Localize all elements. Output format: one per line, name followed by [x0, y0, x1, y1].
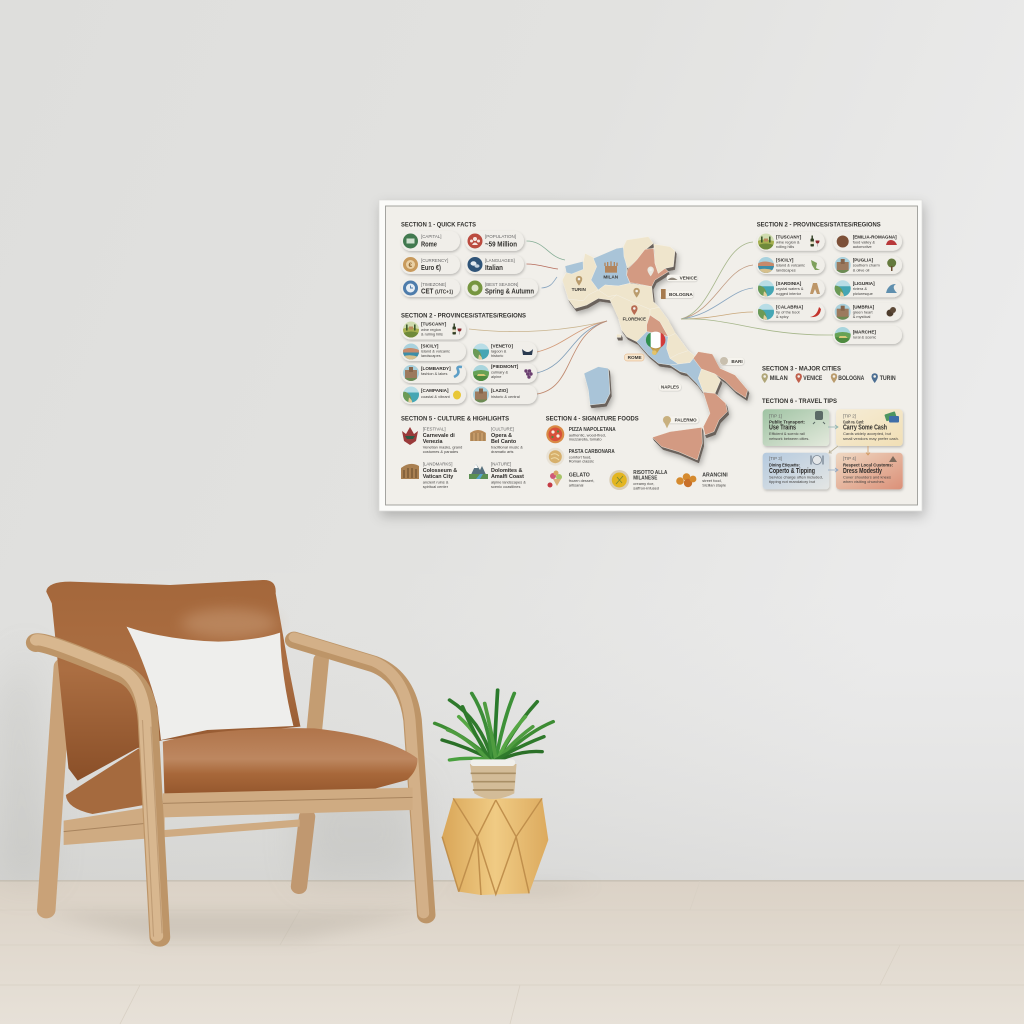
tip 2: Cards widely accepted, but — [843, 431, 892, 436]
white pillow — [127, 627, 293, 740]
tip 1: network between cities. — [769, 436, 809, 441]
item: culture — [470, 427, 523, 454]
label: Bologna — [660, 289, 693, 299]
fact: currency — [401, 255, 460, 274]
tip 2: Cash vs. Card: — [843, 419, 864, 424]
heading: section 2 right: SECTION 2 - PROVINCES/STATES/REGIONS — [757, 222, 881, 228]
item: landmarks: Vatican City — [423, 474, 453, 480]
tip 4: [TIP 4] — [843, 456, 856, 461]
label: Florence: FLORENCE — [623, 317, 646, 322]
region: Campania: [CAMPANIA] — [421, 388, 449, 393]
region: Umbria: green heart — [853, 309, 874, 314]
city: Bologna: BOLOGNA — [838, 376, 865, 382]
heading: section 6: TECTION 6 - TRAVEL TIPS — [762, 398, 837, 405]
region: Piedmont: culinary & — [491, 370, 508, 374]
tip 4: when visiting churches. — [843, 479, 885, 484]
tip 1: Public Transport: — [769, 419, 805, 424]
fact: best season: [BEST SEASON] — [485, 282, 518, 287]
food: gelato — [548, 470, 594, 488]
region: Piedmont: [PIEDMONT] — [491, 364, 519, 369]
item: festival: Venezia — [423, 439, 443, 445]
region: Veneto — [471, 342, 537, 361]
label: Bari: BARI — [731, 359, 743, 364]
item: nature — [469, 462, 526, 489]
region: Emilia-Romagna — [833, 232, 902, 251]
food: pizza: PIZZA NAPOLETANA — [569, 427, 616, 433]
tip 1: Efficient & scenic rail — [769, 431, 805, 436]
item: landmarks: ancient ruins & — [423, 480, 449, 485]
fact: capital: Rome — [421, 240, 437, 248]
section 2: provinces, left column — [401, 312, 537, 404]
floor shadows — [40, 885, 600, 940]
label: Palermo — [663, 416, 699, 428]
woven pot — [470, 764, 517, 799]
seat rails — [64, 788, 413, 845]
region: Lazio — [471, 385, 537, 404]
food: pizza: authentic, wood-fired, — [569, 432, 606, 437]
fact: languages: Italian — [485, 263, 503, 272]
region: Tuscany right: wine region & — [776, 239, 800, 244]
poster paper — [386, 206, 918, 505]
tip 3: Coperto & Tipping — [769, 468, 815, 475]
arrows between tips — [828, 425, 870, 472]
fact: population — [465, 231, 524, 251]
fact: currency: Euro €) — [421, 263, 441, 272]
tip 1: Use Trains — [769, 424, 796, 432]
region: Tuscany right: rolling hills — [776, 244, 794, 249]
plant on stool — [435, 690, 553, 895]
food: arancini: street food, — [702, 478, 722, 483]
label: Palermo: PALERMO — [675, 417, 697, 422]
wall shadow of chair — [0, 640, 420, 880]
food: arancini: ARANCINI — [702, 473, 728, 479]
region: Sardinia: rugged interior — [776, 291, 802, 296]
food: pasta: comfort food, — [569, 454, 591, 459]
item: festival — [402, 427, 462, 454]
region: Puglia: & olive oil — [853, 267, 869, 272]
tip 1 — [763, 409, 829, 446]
pot rim — [471, 759, 515, 766]
tip 2: small vendors may prefer cash. — [843, 436, 899, 441]
item: nature: [NATURE] — [491, 462, 511, 467]
food: pasta: Roman classic — [569, 459, 594, 464]
section 3: major cities — [762, 366, 896, 383]
label: Venice — [667, 275, 697, 281]
region: Sardinia — [757, 279, 825, 297]
region: Lombardy: fashion & lakes — [421, 371, 447, 376]
region: Lazio: historic & central — [491, 394, 520, 399]
region: Calabria: [CALABRIA] — [776, 304, 804, 309]
tip 4: Cover shoulders and knees — [843, 474, 891, 479]
region: Umbria: & mystical — [853, 314, 871, 319]
tip 2: [TIP 2] — [843, 413, 856, 418]
label: Venice: VENICE — [680, 276, 697, 281]
pin: Bologna — [633, 288, 640, 298]
region: Emilia-Romagna: [EMILIA-ROMAGNA] — [853, 234, 897, 239]
fact: timezone: CET (UTC+1) — [421, 286, 453, 296]
pin: Turin — [576, 276, 582, 286]
region: Campania: coastal & vibrant — [421, 394, 451, 399]
food: arancini — [676, 473, 728, 488]
region: Umbria: [UMBRIA] — [853, 304, 875, 309]
city: Venice: VENICE — [803, 376, 822, 382]
label: Turin: TURIN — [572, 287, 587, 292]
item: culture: [CULTURE] — [491, 427, 514, 432]
heading: section 3: SECTION 3 - MAJOR CITIES — [762, 366, 841, 372]
region: Emilia-Romagna: food valley & — [853, 239, 875, 244]
item: culture: dramatic arts — [491, 449, 514, 454]
food: gelato: artisanal — [569, 483, 584, 488]
fact: languages — [465, 255, 524, 274]
connector lines: right regions — [681, 242, 833, 335]
fact: capital — [401, 231, 460, 251]
back legs and rear frame — [46, 660, 321, 910]
item: festival: Venetian masks, grand — [423, 445, 462, 450]
region: Liguria: [LIGURIA] — [853, 281, 875, 286]
item: nature: Dolomites & — [491, 468, 523, 474]
tip 3: [TIP 3] — [769, 456, 782, 461]
region: Liguria: picturesque — [853, 291, 873, 296]
region: Lombardy — [401, 364, 466, 383]
fact: population: ~59 Million — [485, 240, 517, 248]
seat cushion — [163, 728, 417, 802]
region: Liguria: riviera & — [853, 286, 867, 291]
right arm — [294, 637, 426, 915]
tip 3: Dining Etiquette: — [769, 463, 800, 468]
food: risotto — [609, 470, 668, 491]
food: arancini: Sicilian staple — [702, 483, 726, 488]
tip 3: Service charge often included, — [769, 474, 823, 479]
region: Veneto: [VENETO] — [491, 344, 513, 349]
rear seat leather — [66, 748, 163, 814]
region: Puglia: [PUGLIA] — [853, 258, 874, 263]
tip 4: Dress Modestly — [843, 468, 882, 475]
back cushion — [46, 580, 300, 781]
label: Bologna: BOLOGNA — [669, 292, 693, 297]
heading: section 2 left: SECTION 2 - PROVINCES/STATES/REGIONS — [401, 312, 526, 320]
region: Lombardy: [LOMBARDY] — [421, 366, 451, 371]
item: festival: costumes & parades — [423, 449, 458, 454]
tip 3 — [763, 453, 829, 489]
label: Naples: NAPLES — [661, 385, 679, 390]
region: Campania — [401, 385, 466, 404]
food: pizza — [546, 425, 616, 443]
mainland and islands — [562, 237, 748, 460]
label: Rome: ROME — [628, 355, 642, 360]
food: gelato: GELATO — [569, 473, 590, 479]
region: Sicily: landscapes — [421, 353, 441, 358]
tip 1: [TIP 1] — [769, 413, 782, 418]
food: risotto: MILANESE — [633, 475, 658, 481]
fact: timezone: [TIMEZONE] — [421, 282, 446, 287]
region: Sicily right: landscapes — [776, 267, 796, 272]
section 2: provinces, right column — [757, 222, 902, 344]
city: Milan: MILAN — [770, 376, 788, 382]
region: Tuscany: wine region — [421, 327, 441, 332]
item: culture: Bel Canto — [491, 439, 517, 445]
region: Tuscany — [401, 320, 466, 340]
region: Calabria: & spicy — [776, 314, 789, 319]
region: Calabria — [757, 303, 825, 321]
region: Umbria — [833, 303, 902, 322]
framed infographic poster — [379, 200, 922, 511]
region: Liguria — [833, 279, 902, 297]
item: landmarks: Colosseum & — [423, 468, 457, 474]
label: Bari — [720, 357, 744, 365]
item: festival: [FESTIVAL] — [423, 427, 446, 432]
region: Marche: [MARCHE] — [853, 329, 876, 334]
label: Naples — [659, 384, 681, 391]
map of Italy — [562, 237, 748, 460]
item: nature: scenic coastlines — [491, 484, 520, 489]
poster frame — [379, 200, 922, 511]
fact: population: [POPULATION] — [485, 234, 516, 239]
region: Marche: rural & scenic — [853, 334, 876, 339]
item: culture: Opera & — [491, 433, 512, 439]
tip 2 — [836, 409, 903, 446]
food: pasta — [546, 448, 615, 466]
region: Sicily right: [SICILY] — [776, 258, 794, 263]
food: pizza: mozzarella, tomato — [569, 437, 602, 442]
connector lines: quick facts — [526, 241, 565, 288]
region: Veneto: lagoon & — [491, 349, 507, 354]
stool — [442, 798, 548, 895]
region: Marche — [833, 326, 902, 344]
label: Milan: MILAN — [603, 275, 619, 280]
region: Veneto: historic — [491, 353, 503, 358]
item: landmarks: [LANDMARKS] — [423, 462, 452, 467]
section 6: travel tips — [762, 398, 903, 489]
section 1: quick facts — [401, 222, 538, 297]
connector lines: left regions — [469, 321, 607, 394]
item: festival: Carnevale di — [423, 433, 455, 439]
region: Sardinia: [SARDINIA] — [776, 281, 802, 286]
food: risotto: RISOTTO ALLA — [633, 470, 668, 476]
region: Lazio: [LAZIO] — [491, 388, 508, 393]
section 4: signature foods — [546, 416, 728, 491]
tip 2: Carry Some Cash — [843, 424, 887, 432]
region: Sicily: island & volcanic — [421, 349, 450, 354]
leaves — [435, 690, 553, 760]
left arm grain — [142, 720, 162, 937]
item: nature: alpine landscapes & — [491, 480, 526, 485]
region: Sicily: [SICILY] — [421, 344, 439, 349]
section 5: culture and highlights — [401, 416, 526, 489]
item: nature: Amalfi Coast — [491, 474, 524, 480]
fact: languages: [LANGUAGES] — [485, 258, 515, 263]
tip 3: tipping not mandatory but — [769, 479, 816, 484]
label: Rome — [625, 354, 644, 361]
icon: Milan cathedral — [605, 261, 617, 273]
cushion highlight — [181, 608, 278, 638]
item: landmarks: spiritual center — [423, 484, 449, 489]
food: risotto: saffron-infused — [633, 486, 659, 491]
fact: timezone — [401, 279, 460, 297]
heading: section 4: SECTION 4 - SIGNATURE FOODS — [546, 416, 639, 423]
item: culture: traditional music & — [491, 445, 523, 450]
region: Calabria: tip of the boot — [776, 309, 800, 314]
region: Sicily right: island & volcanic — [776, 263, 805, 268]
tip 4: Respect Local Customs: — [843, 463, 893, 468]
region: Puglia: southern charm — [853, 263, 880, 268]
floor — [0, 880, 1024, 1024]
item: landmarks — [401, 462, 457, 489]
food: pasta: PASTA CARBONARA — [569, 449, 615, 455]
fact: currency: € — [408, 262, 412, 269]
fact: capital: [CAPITAL] — [421, 234, 441, 239]
food: risotto: creamy rice, — [633, 481, 654, 486]
region: Tuscany: & rolling hills — [421, 332, 443, 336]
region: Emilia-Romagna: automotive — [853, 244, 872, 249]
region: Tuscany right — [757, 232, 825, 251]
region: Sicily right — [757, 256, 825, 274]
fact: best season: Spring & Autumn — [485, 286, 534, 296]
tip 4 — [836, 453, 903, 489]
fact: best season — [465, 279, 538, 297]
heading: section 5: SECTION 5 - CULTURE & HIGHLIGHTS — [401, 416, 509, 423]
fact: currency: [CURRENCY] — [421, 258, 448, 263]
region: Puglia — [833, 256, 902, 275]
region: Tuscany right: [TUSCANY] — [776, 234, 802, 239]
armchair — [36, 580, 426, 937]
pin: Italian flag — [646, 332, 665, 355]
region: Piedmont — [471, 364, 537, 383]
pin: Florence — [631, 305, 638, 315]
city: Turin: TURIN — [880, 376, 896, 382]
food: gelato: frozen dessert, — [569, 478, 594, 483]
region: Sardinia: crystal waters & — [776, 286, 804, 291]
pin: Venice — [647, 267, 654, 276]
region: Sicily — [401, 342, 466, 361]
heading: section 1: SECTION 1 - QUICK FACTS — [401, 222, 476, 228]
region: Tuscany: [TUSCANY] — [421, 322, 447, 327]
left arm — [36, 640, 160, 937]
region: Piedmont: alpine — [491, 374, 501, 379]
